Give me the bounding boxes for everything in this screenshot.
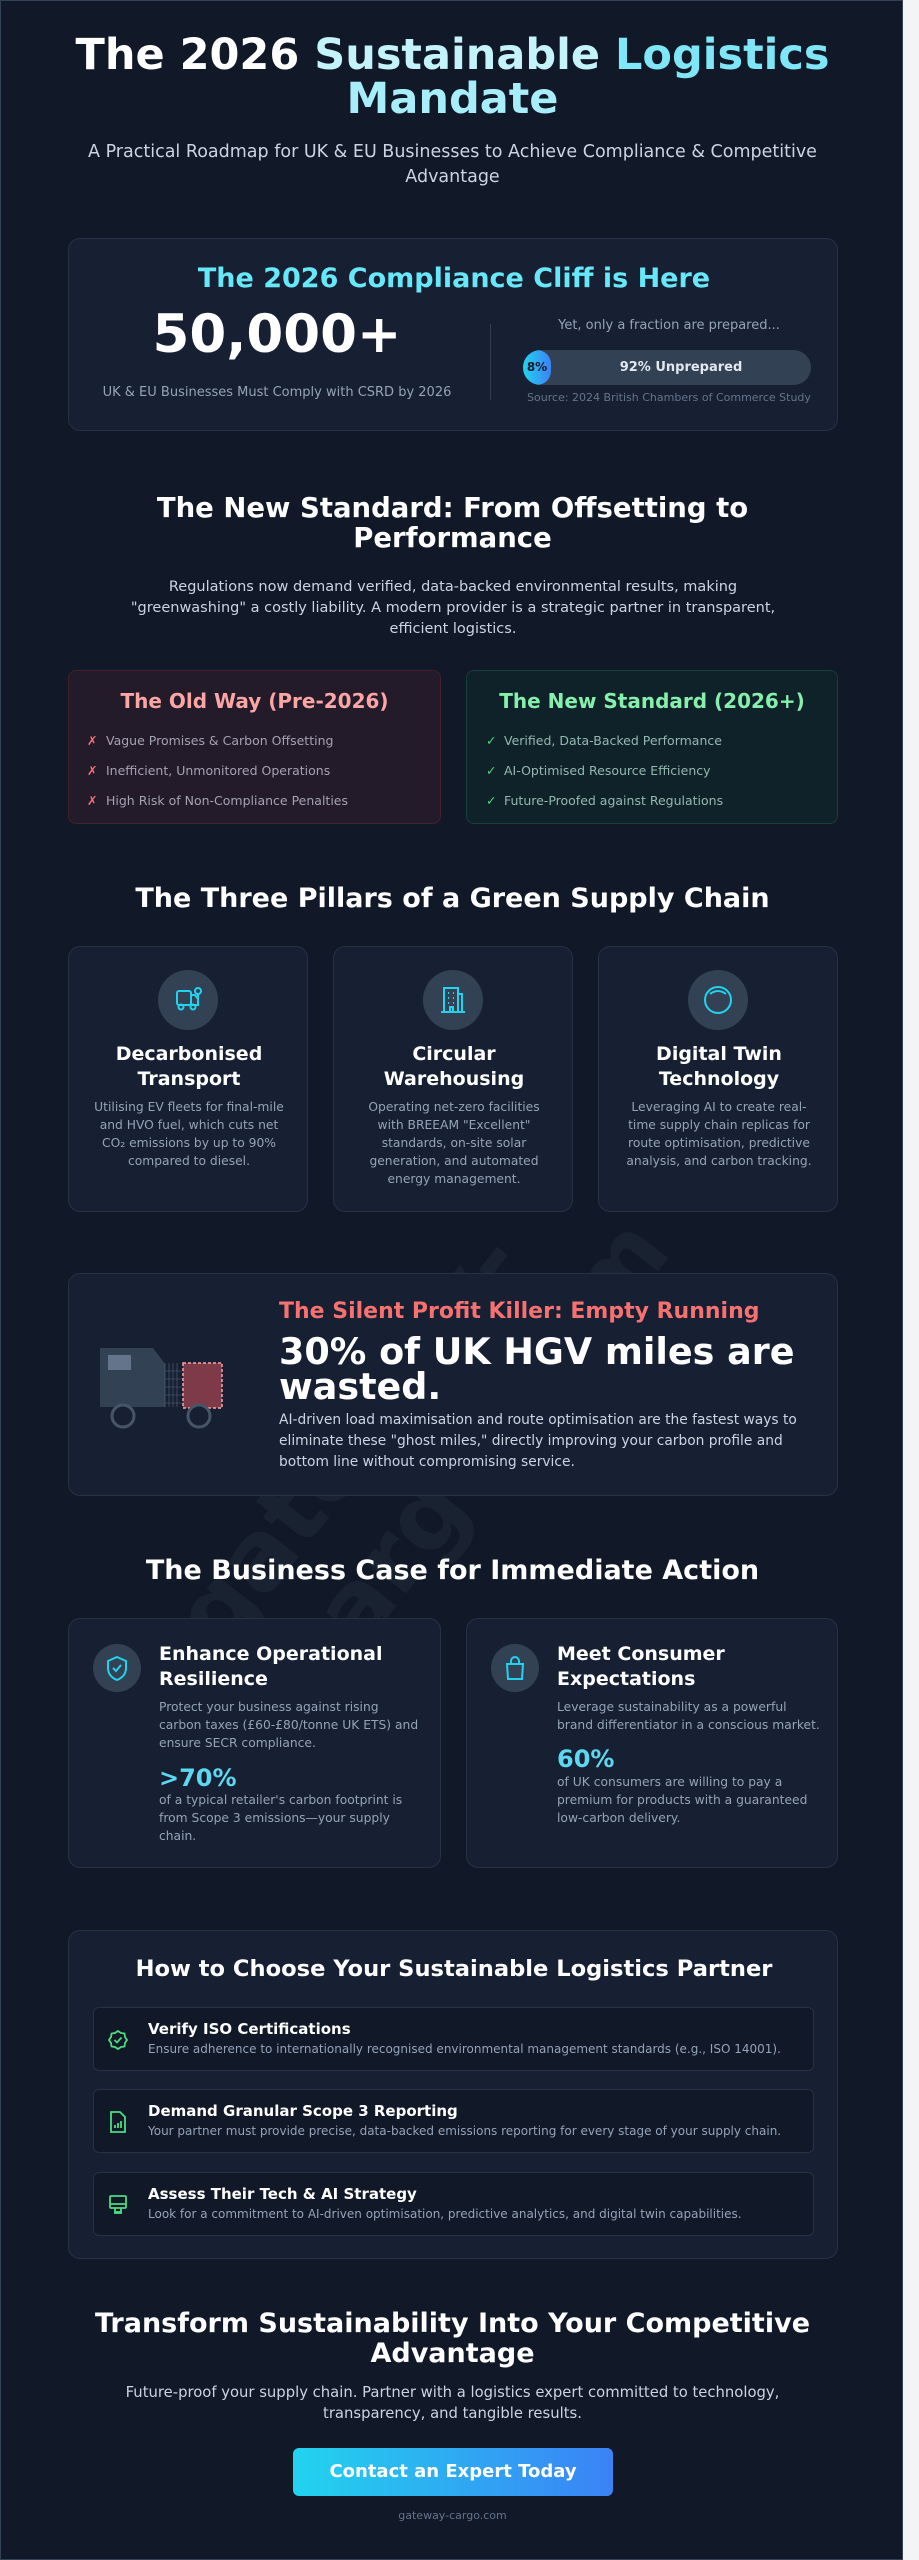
caption: UK & EU Businesses Must Comply with CSRD by 2026 — [103, 385, 451, 400]
preparedness bar: 92% Unprepared — [620, 360, 742, 375]
list: new standard — [486, 733, 723, 808]
list: new standard: ✓ — [486, 793, 496, 808]
heading: old way: The Old Way (Pre-2026) — [120, 689, 389, 713]
watermark: gateway- — [151, 1209, 546, 1670]
card: consumer expectations — [466, 1618, 838, 1868]
heading: call to action: Transform Sustainability Into Your Competitive Advantage — [95, 2308, 810, 2369]
stat: 30%: 30% of UK HGV miles are — [279, 1330, 794, 1373]
icon: empty truck — [100, 1348, 223, 1428]
list: old way: Vague Promises & Carbon Offsetting — [106, 733, 333, 748]
list: old way: High Risk of Non-Compliance Penalties — [106, 793, 348, 808]
card: circular warehousing — [333, 946, 573, 1212]
icon: truck — [158, 970, 218, 1030]
stat: 30% — [279, 1330, 794, 1408]
item: scope 3 — [93, 2089, 814, 2153]
description: Protect your business against rising carbon taxes (£60-£80/tonne UK ETS) and ensure SECR compliance. — [159, 1700, 418, 1750]
heading: new standard: The New Standard: From Offsetting to Performance — [157, 492, 748, 554]
item: tech & AI: Look for a commitment to AI-driven optimisation, predictive analytics, and digital twin capabilities. — [148, 2207, 742, 2221]
preparedness bar: Source: 2024 British Chambers of Commerce Study — [527, 391, 811, 404]
description: Utilising EV fleets for final-mile and HVO fuel, which cuts net CO₂ emissions by up to 90% compared to diesel. — [94, 1100, 284, 1168]
list: new standard: Verified, Data-Backed Performance — [504, 733, 722, 748]
card: digital twin — [598, 946, 838, 1212]
paragraph: new standard: "greenwashing" a costly liability. A modern provider is a strategic partner in transparent, — [131, 600, 775, 616]
item: scope 3: Your partner must provide precise, data-backed emissions reporting for every stage of your supply chain. — [148, 2124, 781, 2138]
list: old way: ✗ — [87, 793, 97, 808]
list: new standard: ✓ — [486, 733, 496, 748]
preparedness bar: Yet, only a fraction are prepared... — [558, 318, 780, 333]
heading: new standard box: The New Standard (2026+) — [499, 689, 805, 713]
icon: building — [423, 970, 483, 1030]
paragraph: new standard: efficient logistics. — [390, 621, 516, 637]
subtitle: A Practical Roadmap for UK & EU Businesses to Achieve Compliance & Competitive Advantage — [88, 142, 817, 187]
description: Operating net-zero facilities with BREEAM "Excellent" standards, on-site solar generation, and automated energy management. — [368, 1100, 540, 1186]
description: Leverage sustainability as a powerful brand differentiator in a conscious market. — [557, 1700, 820, 1732]
title: Mandate — [347, 74, 558, 124]
stat: 60%: 60% — [557, 1745, 614, 1773]
paragraph: call to action: Future-proof your supply chain. Partner with a logistics expert committed to technology, transparency, and tangible results. — [126, 2384, 779, 2422]
icon: badge check — [108, 2030, 128, 2050]
panel: compliance cliff — [68, 238, 838, 431]
title: Meet Consumer Expectations — [557, 1643, 725, 1690]
list: old way: ✗ — [87, 733, 97, 748]
icon: monitor — [109, 2195, 127, 2214]
list: new standard: ✓ — [486, 763, 496, 778]
list: new standard: AI-Optimised Resource Efficiency — [504, 763, 711, 778]
stat: >70%: >70% — [159, 1764, 237, 1792]
stat: 50,000+: 50,000+ — [153, 304, 401, 365]
list: new standard: Future-Proofed against Regulations — [504, 793, 723, 808]
preparedness bar: 8% — [527, 360, 547, 374]
panel: empty running — [68, 1273, 838, 1496]
button: contact — [293, 2448, 613, 2496]
heading: compliance cliff: The 2026 Compliance Cliff is Here — [198, 263, 710, 294]
list: old way: Inefficient, Unmonitored Operations — [106, 763, 330, 778]
preparedness bar — [523, 318, 811, 404]
item: tech & AI: Assess Their Tech & AI Strategy — [148, 2185, 417, 2203]
list: old way: ✗ — [87, 763, 97, 778]
heading: choose partner: How to Choose Your Sustainable Logistics Partner — [136, 1956, 772, 1982]
heading: empty running: The Silent Profit Killer: Empty Running — [279, 1299, 760, 1324]
stat caption: of a typical retailer's carbon footprint is from Scope 3 emissions—your supply chain. — [159, 1793, 402, 1843]
paragraph: new standard — [131, 579, 775, 637]
item: ISO: Ensure adherence to internationally recognised environmental management standards (e.g., ISO 14001). — [148, 2042, 781, 2056]
item: ISO — [93, 2007, 814, 2071]
card: operational resilience — [68, 1618, 441, 1868]
stat: 30%: wasted. — [279, 1365, 441, 1408]
title: Enhance Operational Resilience — [159, 1643, 382, 1690]
button: contact: Contact an Expert Today — [329, 2461, 577, 2482]
title: Decarbonised Transport — [116, 1043, 262, 1090]
panel: old way — [68, 670, 441, 824]
icon: shield — [93, 1644, 141, 1692]
footer url: gateway-cargo.com — [398, 2509, 507, 2522]
paragraph: new standard: Regulations now demand verified, data-backed environmental results, making — [169, 579, 737, 595]
description: Leveraging AI to create real-time supply chain replicas for route optimisation, predictive analysis, and carbon tracking. — [626, 1100, 812, 1168]
panel: new standard — [466, 670, 838, 824]
item: tech & AI — [93, 2172, 814, 2236]
card: decarbonised transport — [68, 946, 308, 1212]
title: Circular Warehousing — [384, 1043, 524, 1090]
list: old way — [87, 733, 348, 808]
item: ISO: Verify ISO Certifications — [148, 2020, 351, 2038]
heading: business case: The Business Case for Immediate Action — [146, 1555, 759, 1586]
item: scope 3: Demand Granular Scope 3 Reporting — [148, 2102, 458, 2120]
title: Digital Twin Technology — [656, 1043, 782, 1090]
icon: globe — [688, 970, 748, 1030]
watermark: cargo.com — [256, 1197, 691, 1710]
title: The 2026 Sustainable Logistics — [76, 30, 829, 80]
title — [76, 30, 829, 124]
paragraph: AI-driven load maximisation and route optimisation are the fastest ways to eliminate these "ghost miles," directly improving your carbon profile and bottom line without compromising service. — [279, 1412, 797, 1470]
icon: shopping bag — [491, 1644, 539, 1692]
icon: report — [110, 2111, 126, 2133]
stat caption: of UK consumers are willing to pay a premium for products with a guaranteed low-carbon delivery. — [557, 1775, 807, 1825]
heading: three pillars: The Three Pillars of a Green Supply Chain — [135, 883, 770, 914]
panel: choose partner — [68, 1930, 838, 2259]
